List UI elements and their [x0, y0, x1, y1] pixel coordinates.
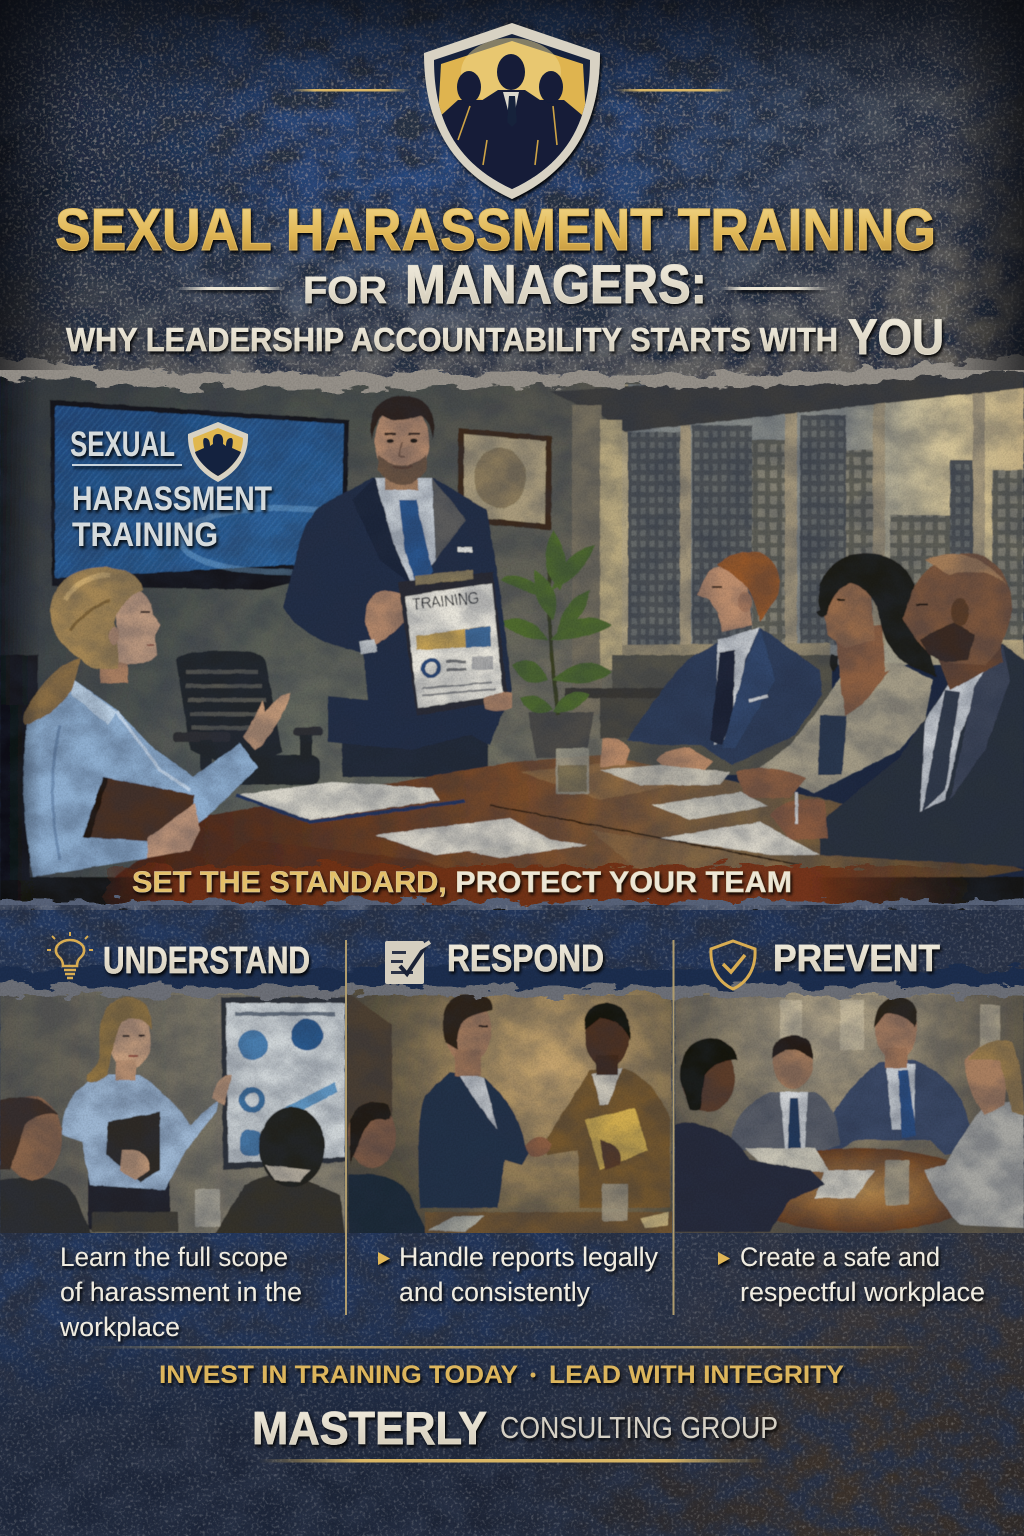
text: respond description: Handle reports legally: [399, 1242, 658, 1272]
footer divider line: [85, 1346, 930, 1348]
torn header edge: [0, 0, 1024, 390]
torn navy strip above scene panels: [0, 968, 1024, 986]
column: understand: [47, 932, 310, 1342]
framed map: [458, 428, 552, 530]
table papers and glass: [236, 748, 589, 858]
text: prevent description: [718, 1242, 985, 1307]
lower footer brown tone: [0, 1130, 1024, 1536]
text: prevent description: respectful workplace: [740, 1277, 985, 1307]
brand name: [252, 1402, 778, 1454]
clipboard: TRAINING: [412, 589, 480, 614]
man in brown sweater: [525, 1003, 670, 1208]
plant: [500, 530, 612, 758]
table: [110, 755, 1024, 880]
red haired man: [600, 552, 822, 785]
heading: respond: RESPOND: [447, 938, 604, 980]
lower section mottled texture: [0, 905, 1024, 1536]
man in navy suit: [418, 993, 530, 1208]
subtitle: for managers: MANAGERS:: [405, 253, 707, 315]
tv screen text: [70, 425, 272, 554]
tv screen: [50, 400, 380, 590]
title: [55, 197, 944, 365]
torn edge above lower section: [0, 901, 1024, 913]
panel: respond scene: [347, 985, 675, 1235]
column: respond: [378, 938, 658, 1307]
whiteboard chart: [221, 997, 345, 1170]
tagline text: SET THE STANDARD, PROTECT YOUR TEAM: [132, 866, 792, 899]
text: respond description: [378, 1242, 658, 1307]
subtitle: for managers: [303, 253, 707, 315]
hero painted texture: [0, 360, 1024, 905]
subtitle: why leadership accountability: [66, 309, 944, 365]
table and glass: [425, 1184, 675, 1234]
icon: tv shield logo: [188, 422, 248, 482]
header block: [0, 0, 1024, 375]
icon: lightbulb: [47, 932, 93, 978]
clipboard: [398, 570, 512, 716]
dark floor under banner: [0, 877, 1024, 911]
standing man: [812, 997, 978, 1160]
tagline banner: [105, 866, 965, 905]
brand name: CONSULTING GROUP: [500, 1410, 778, 1445]
subtitle: for managers: FOR: [303, 270, 387, 312]
footer gold rule: [258, 1459, 768, 1462]
scene panels painted texture: [0, 995, 1024, 1233]
lower section speckle: [0, 905, 1024, 1536]
icon: shield check: [711, 941, 755, 989]
text: understand description: workplace: [59, 1312, 180, 1342]
office chair: [173, 651, 323, 785]
tv screen text: SEXUAL: [70, 425, 175, 464]
panel dividers: [345, 940, 674, 1315]
column: prevent: [711, 938, 985, 1307]
round table: [738, 1148, 982, 1232]
call to action: INVEST IN TRAINING TODAY: [159, 1361, 518, 1389]
torn rim above scene panels: [0, 984, 1024, 996]
lower footer darkening: [0, 1320, 1024, 1536]
header decorative gold lines: [290, 89, 735, 92]
seated woman right: [925, 1040, 1024, 1228]
lower section block: [0, 910, 1024, 1536]
presenter: [283, 396, 512, 777]
text: understand description: of harassment in the: [60, 1277, 302, 1307]
subtitle: why leadership accountability: YOU: [848, 309, 944, 365]
vignette edges: [0, 0, 1024, 370]
warm office backdrop: [347, 985, 672, 1235]
icon: checklist clipboard: [385, 941, 430, 984]
bald man: [660, 553, 1024, 867]
call to action: LEAD WITH INTEGRITY: [549, 1361, 844, 1389]
icon: leadership shield: [424, 23, 600, 199]
tv screen text: TRAINING: [72, 516, 218, 554]
seated man in foreground: [348, 1102, 428, 1235]
heading: understand: UNDERSTAND: [103, 940, 310, 982]
city window: [550, 358, 1024, 665]
curly haired woman: [652, 553, 937, 820]
center man: [730, 1035, 840, 1150]
subtitle: why leadership accountability: WHY LEADERSHIP ACCOUNTABILITY STARTS WITH: [66, 321, 838, 358]
bright window backdrop: [675, 985, 1024, 1235]
text: prevent description: Create a safe and: [740, 1242, 940, 1272]
tv screen text: HARASSMENT: [72, 480, 272, 518]
panel: prevent scene: [675, 985, 1024, 1235]
room wall: [0, 985, 345, 1235]
heading: prevent: PREVENT: [773, 938, 940, 980]
title: SEXUAL HARASSMENT TRAINING: [55, 197, 936, 263]
hero edge darkening: [0, 360, 40, 910]
column and lower wall: [565, 405, 832, 775]
panel: understand scene: [0, 985, 345, 1235]
call to action: [159, 1361, 844, 1389]
door: [347, 992, 392, 1140]
text: respond description: and consistently: [399, 1277, 590, 1307]
brand name: MASTERLY: [252, 1402, 487, 1454]
seated man left: [675, 1038, 825, 1232]
hero meeting room scene: [0, 358, 1024, 911]
text: understand description: Learn the full scope: [60, 1242, 288, 1272]
blonde woman: [0, 567, 291, 880]
text: understand description: [59, 1242, 302, 1342]
seated men: [0, 1096, 345, 1235]
presenter woman: [62, 997, 232, 1230]
wall: [0, 360, 640, 880]
